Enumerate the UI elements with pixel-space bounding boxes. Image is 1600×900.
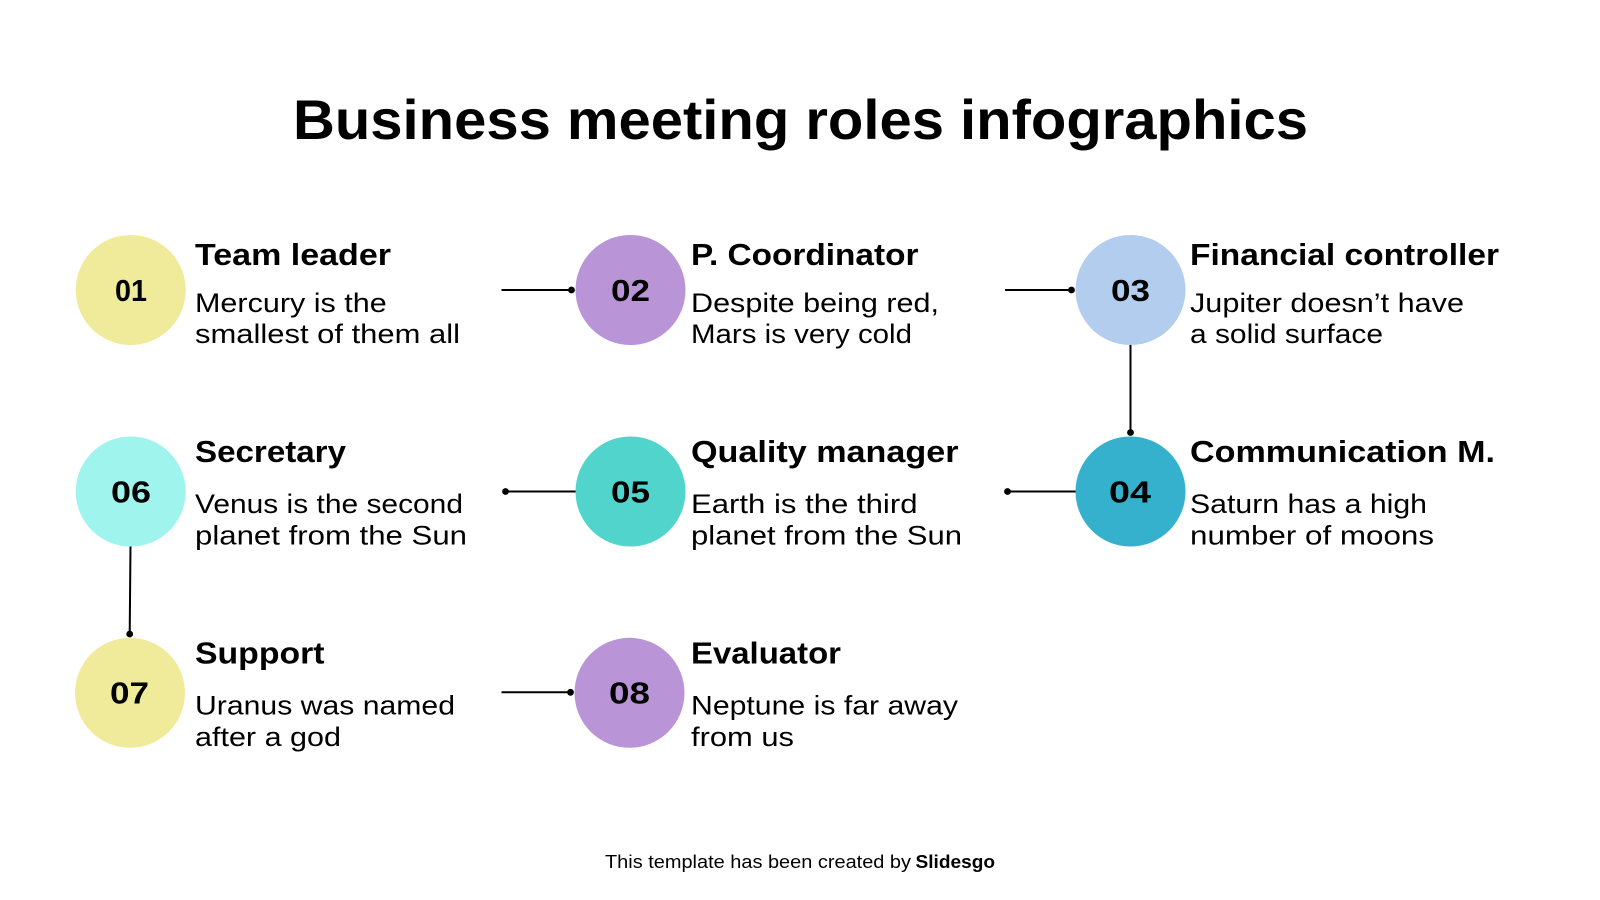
description: from us — [691, 722, 794, 752]
description: smallest of them all — [195, 319, 460, 349]
role 01: Team leader — [76, 235, 460, 349]
number badge 07: 07 — [110, 676, 149, 710]
number badge 04: 04 — [1109, 474, 1152, 510]
role 07: Support — [75, 636, 455, 752]
number badge 06: 06 — [111, 474, 151, 510]
heading: P. Coordinator: P. Coordinator — [691, 237, 918, 272]
connector: 06 to 07 — [126, 546, 133, 637]
role 04: Communication M. — [1076, 434, 1495, 550]
description: Jupiter doesn’t have — [1190, 288, 1464, 318]
number badge 02: 02 — [611, 273, 650, 308]
connector: 03 to 04 — [1127, 345, 1134, 436]
description: planet from the Sun — [691, 520, 962, 550]
connector: 05 to 06 — [502, 488, 576, 495]
number badge 01: 01 — [115, 273, 147, 308]
heading: Secretary: Secretary — [195, 434, 347, 469]
role 08: Evaluator — [574, 636, 959, 752]
description: number of moons — [1190, 520, 1434, 550]
role 06: Secretary — [76, 434, 467, 550]
description: Despite being red, — [691, 288, 939, 318]
description: planet from the Sun — [195, 520, 467, 550]
number badge 01 — [76, 235, 186, 345]
heading: Evaluator: Evaluator — [691, 636, 841, 670]
heading: Quality manager: Quality manager — [691, 434, 958, 469]
heading: Communication M.: Communication M. — [1190, 434, 1495, 469]
number badge 02 — [576, 235, 686, 345]
number badge 04 — [1076, 436, 1186, 546]
description: Venus is the second — [195, 489, 463, 519]
description: Saturn has a high — [1190, 489, 1427, 519]
description — [1190, 288, 1464, 349]
number badge 07 — [75, 638, 185, 748]
description: after a god — [195, 722, 341, 752]
title: Business meeting roles infographics — [293, 88, 1308, 151]
description: Earth is the third — [691, 489, 918, 519]
footer credit: This template has been created by — [605, 852, 911, 872]
heading: Financial controller: Financial controller — [1190, 237, 1499, 272]
description: Neptune is far away — [691, 690, 959, 720]
number badge 06 — [76, 436, 186, 546]
description — [1190, 489, 1434, 550]
number badge 05: 05 — [611, 474, 650, 510]
description — [691, 489, 962, 550]
number badge 08 — [574, 638, 684, 748]
role 03: Financial controller — [1076, 235, 1499, 349]
description — [195, 690, 455, 752]
description: Mars is very cold — [691, 319, 912, 349]
connector: 01 to 02 — [502, 287, 575, 293]
number badge 03 — [1076, 235, 1186, 345]
footer credit: Slidesgo — [916, 852, 995, 872]
heading: Team leader: Team leader — [195, 237, 391, 272]
description — [691, 288, 939, 349]
description: Uranus was named — [195, 690, 455, 720]
description — [195, 489, 467, 550]
description: a solid surface — [1190, 319, 1383, 349]
description: Mercury is the — [195, 288, 387, 318]
connector: 02 to 03 — [1005, 287, 1075, 293]
role 02: P. Coordinator — [576, 235, 939, 349]
connector: 04 to 05 — [1004, 488, 1076, 495]
description — [195, 288, 460, 349]
role 05: Quality manager — [576, 434, 962, 550]
number badge 08: 08 — [609, 676, 650, 710]
description — [691, 690, 959, 752]
number badge 05 — [576, 436, 686, 546]
heading: Support: Support — [195, 636, 324, 670]
connector: 07 to 08 — [502, 689, 574, 696]
number badge 03: 03 — [1111, 273, 1150, 308]
